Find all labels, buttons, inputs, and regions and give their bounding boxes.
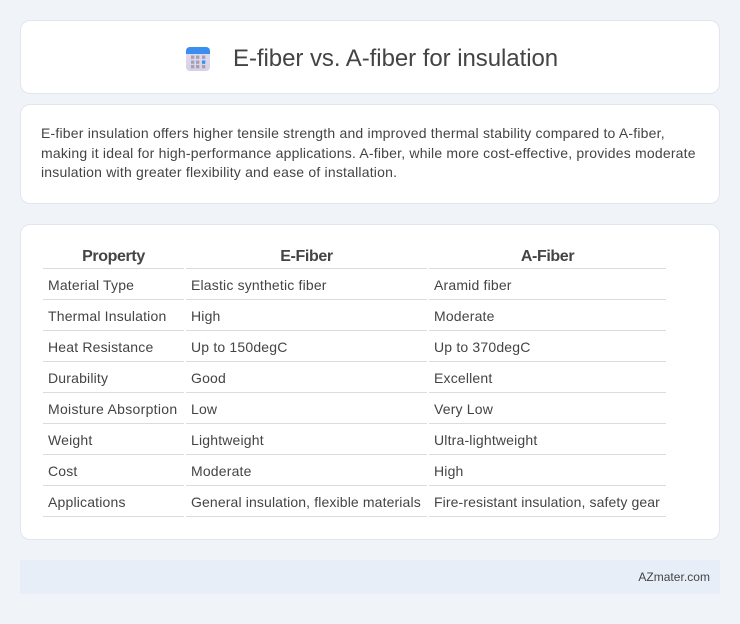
comparison table: Heat Resistance	[48, 339, 153, 355]
comparison table: Cost	[48, 463, 78, 479]
comparison table: Ultra-lightweight	[434, 432, 537, 448]
comparison table: Good	[191, 370, 226, 386]
comparison table: Very Low	[434, 401, 493, 417]
comparison table: Up to 150degC	[191, 339, 288, 355]
comparison table: Lightweight	[191, 432, 264, 448]
summary text: insulation with greater flexibility and ease of installation.	[41, 164, 397, 180]
comparison table: Moisture Absorption	[48, 401, 177, 417]
column headers: Property	[82, 248, 145, 265]
comparison table: Applications	[48, 494, 126, 510]
comparison table: Low	[191, 401, 217, 417]
comparison table: Up to 370degC	[434, 339, 531, 355]
comparison table: Thermal Insulation	[48, 308, 166, 324]
summary text	[41, 125, 696, 180]
summary text: E-fiber insulation offers higher tensile strength and improved thermal stability compared to A-fiber,	[41, 125, 665, 141]
header panel	[20, 20, 720, 94]
comparison table: Moderate	[434, 308, 495, 324]
comparison table: High	[191, 308, 221, 324]
summary text: making it ideal for high-performance applications. A-fiber, while more cost-effective, provides moderate	[41, 144, 696, 160]
column headers: E-Fiber	[280, 248, 333, 265]
comparison table: High	[434, 463, 464, 479]
panel: comparison table	[20, 224, 720, 540]
comparison table: Elastic synthetic fiber	[191, 277, 327, 293]
comparison table: General insulation, flexible materials	[191, 494, 421, 510]
comparison table: Weight	[48, 432, 92, 448]
title: E-fiber vs. A-fiber for insulation	[233, 45, 558, 72]
comparison table: Aramid fiber	[434, 277, 512, 293]
icon: calendar	[186, 47, 210, 71]
footer brand: AZmater.com	[638, 570, 710, 584]
comparison table: Excellent	[434, 370, 492, 386]
comparison table: Material Type	[48, 277, 134, 293]
column headers	[82, 248, 574, 265]
comparison table: Durability	[48, 370, 108, 386]
footer bar	[20, 560, 720, 594]
comparison table: Moderate	[191, 463, 252, 479]
summary panel	[20, 104, 720, 204]
comparison table: Fire-resistant insulation, safety gear	[434, 494, 660, 510]
column headers: A-Fiber	[521, 248, 574, 265]
